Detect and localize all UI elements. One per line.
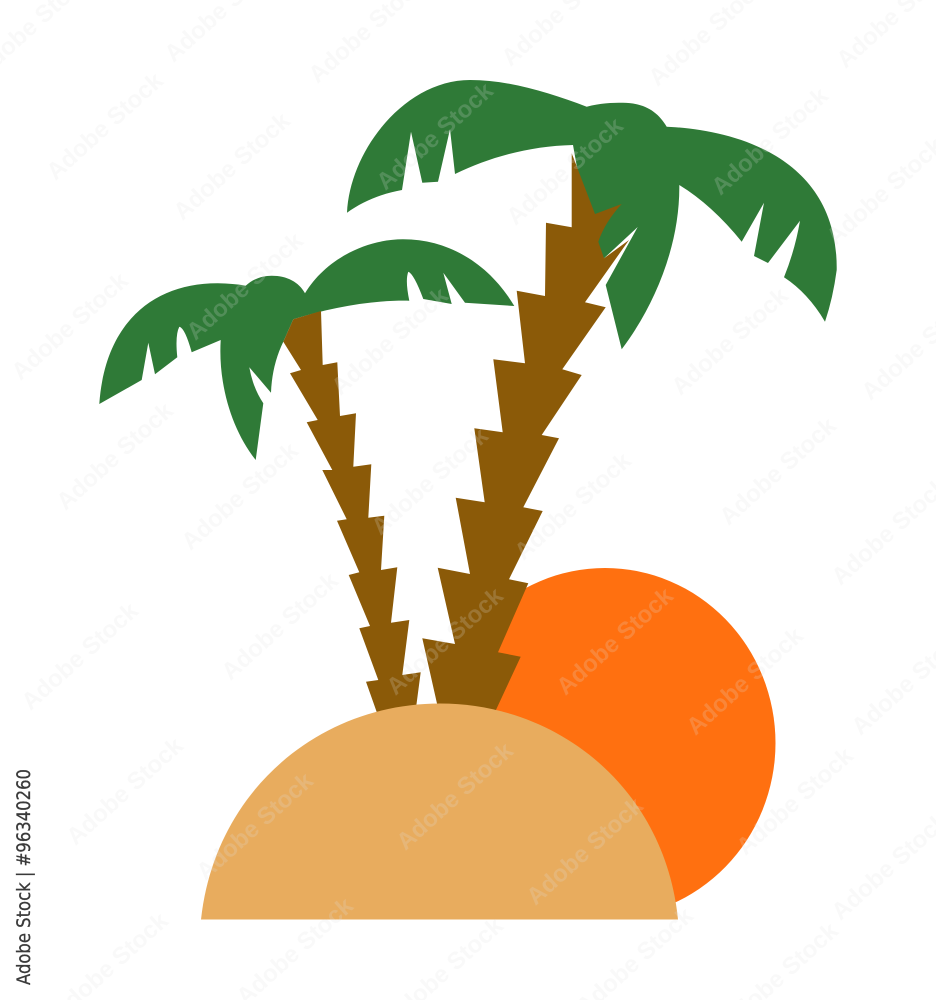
icon: large palm trunk [422, 153, 629, 712]
watermark: repeated Adobe Stock text: Adobe Stock [714, 412, 842, 531]
watermark: repeated Adobe Stock text: Adobe Stock [666, 282, 794, 401]
watermark: repeated Adobe Stock text: Adobe Stock [51, 397, 179, 516]
watermark: repeated Adobe Stock text: Adobe Stock [366, 422, 494, 541]
watermark: repeated Adobe Stock text: Adobe Stock [216, 567, 344, 686]
watermark: repeated Adobe Stock text: Adobe Stock [391, 737, 519, 856]
watermark: repeated Adobe Stock text: Adobe Stock [326, 282, 454, 401]
watermark: repeated Adobe Stock text: Adobe Stock [509, 447, 637, 566]
watermark: repeated Adobe Stock text: Adobe Stock [371, 77, 499, 196]
watermark: repeated Adobe Stock text: Adobe Stock [551, 582, 679, 701]
watermark: repeated Adobe Stock text: Adobe Stock [501, 112, 629, 231]
icon: small palm trunk [283, 311, 421, 712]
watermark: repeated Adobe Stock text: Adobe Stock [176, 437, 304, 556]
watermark: repeated Adobe Stock text: Adobe Stock [681, 622, 809, 741]
watermark: repeated Adobe Stock text: Adobe Stock [41, 67, 169, 186]
watermark: repeated Adobe Stock text: Adobe Stock [521, 792, 649, 911]
icon: orange sun [434, 568, 776, 918]
watermark: repeated Adobe Stock text: Adobe Stock [191, 767, 319, 886]
icon: large palm foliage [347, 80, 837, 349]
watermark: repeated Adobe Stock text: Adobe Stock [731, 742, 859, 861]
icon: small palm foliage [99, 239, 514, 460]
watermark: repeated Adobe Stock text: Adobe Stock [16, 597, 144, 716]
watermark: repeated Adobe Stock text: Adobe Stock [168, 107, 296, 226]
watermark: repeated Adobe Stock text: Adobe Stock [706, 82, 834, 201]
watermark: repeated Adobe Stock text: Adobe Stock [181, 227, 309, 346]
caption: stock image id: Adobe Stock | #96340260 [13, 769, 35, 985]
watermark: repeated Adobe Stock text: Adobe Stock [6, 267, 134, 386]
watermark: repeated Adobe Stock text: Adobe Stock [61, 732, 189, 851]
watermark: repeated Adobe Stock text: Adobe Stock [381, 582, 509, 701]
icon: sand hill [201, 704, 678, 920]
